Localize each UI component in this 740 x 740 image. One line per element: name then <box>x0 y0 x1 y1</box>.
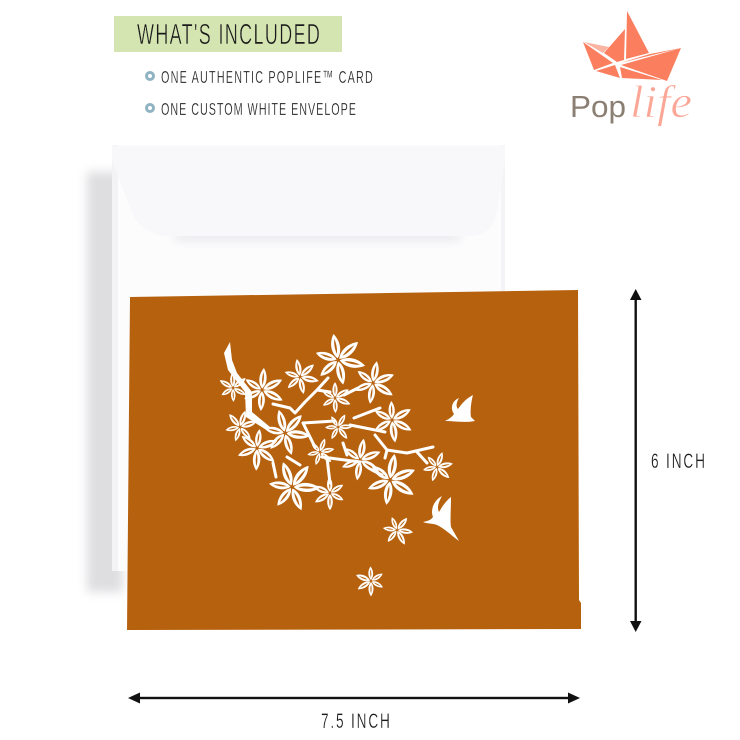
bullet: envelope item <box>146 104 154 112</box>
logo wordmark: life: life <box>630 76 692 127</box>
envelope flap <box>112 146 505 236</box>
illustration: blossom branch and birds <box>213 329 475 596</box>
icon: upper bird <box>445 395 475 422</box>
envelope body <box>112 145 505 571</box>
envelope shadow <box>87 172 123 592</box>
greeting card <box>127 290 581 630</box>
flap shadow <box>175 233 460 240</box>
card face <box>127 290 581 630</box>
logo wordmark: Pop: Pop <box>570 89 626 124</box>
branches <box>224 342 433 483</box>
bullet: card item <box>146 72 154 80</box>
label: 6 inch: 6 INCH <box>651 449 705 473</box>
arrow: height dimension <box>630 289 642 632</box>
text: envelope item: ONE CUSTOM WHITE ENVELOPE <box>161 100 356 120</box>
Poplife logo <box>570 11 692 127</box>
icon: lower bird <box>423 496 459 541</box>
label: 7.5 inch: 7.5 INCH <box>321 709 390 733</box>
icon: origami boat <box>583 11 681 81</box>
arrow: width dimension <box>128 692 580 704</box>
blossoms <box>213 329 458 596</box>
heading: what's included: WHAT'S INCLUDED <box>137 19 320 51</box>
list of included items <box>146 68 373 120</box>
text: card item: ONE AUTHENTIC POPLIFE™ CARD <box>161 68 373 88</box>
envelope <box>87 145 505 592</box>
